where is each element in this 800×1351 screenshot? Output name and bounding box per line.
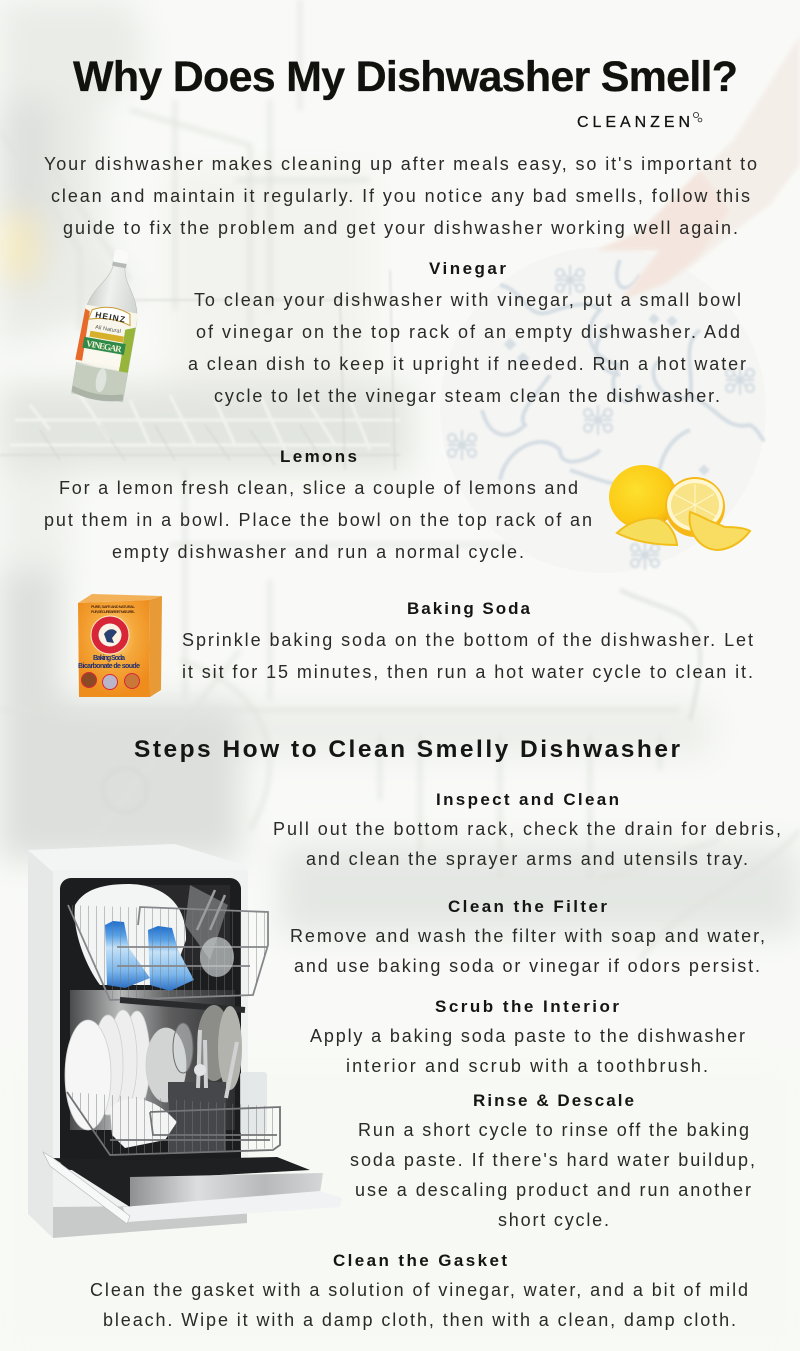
upper rack: [68, 890, 268, 1000]
heading: steps: Steps How to Clean Smelly Dishwasher: [134, 736, 680, 763]
step: scrub the interior: Apply a baking soda paste to the dishwasher: [310, 1026, 745, 1046]
step: clean the gasket: bleach. Wipe it with a damp cloth, then with a clean, damp cloth.: [103, 1310, 736, 1330]
illustration: open dishwasher: [28, 844, 342, 1238]
step: scrub the interior: interior and scrub with a toothbrush.: [346, 1056, 708, 1076]
step: rinse and descale: Run a short cycle to rinse off the baking: [358, 1120, 749, 1140]
intro text: guide to fix the problem and get your dishwasher working well again.: [63, 218, 738, 238]
dishwasher top panel: [28, 844, 247, 872]
background: patterned plate: [440, 247, 766, 573]
section: vinegar: To clean your dishwasher with vinegar, put a small bowl: [194, 290, 741, 310]
step: rinse and descale: use a descaling product and run another: [355, 1180, 751, 1200]
section: lemons: For a lemon fresh clean, slice a couple of lemons and: [59, 478, 578, 498]
section: baking soda: [182, 599, 753, 682]
section: lemons: empty dishwasher and run a normal cycle.: [112, 542, 524, 562]
logo: CLEANZEN: CLEANZEN: [577, 114, 690, 131]
background: hand holding plate: [597, 35, 800, 300]
step: rinse and descale: soda paste. If there's hard water buildup,: [350, 1150, 755, 1170]
section: baking soda: Baking Soda: [407, 599, 531, 618]
upper plates: [75, 884, 186, 985]
dishwasher interior: [60, 878, 241, 1170]
step: scrub the interior: Scrub the Interior: [435, 997, 619, 1016]
section: lemons: Lemons: [280, 447, 357, 466]
step: rinse and descale: short cycle.: [498, 1210, 609, 1230]
step: clean the filter: and use baking soda or vinegar if odors persist.: [294, 956, 760, 976]
section: lemons: [44, 447, 592, 562]
step: clean the filter: Remove and wash the filter with soap and water,: [290, 926, 765, 946]
section: baking soda: Sprinkle baking soda on the bottom of the dishwasher. Let: [182, 630, 753, 650]
icon: baking soda box: Baking Soda: [93, 655, 125, 662]
step: inspect and clean: [273, 790, 781, 869]
step: scrub the interior: [310, 997, 745, 1076]
section: vinegar: Vinegar: [429, 259, 506, 278]
section: lemons: put them in a bowl. Place the bowl on the top rack of an: [44, 510, 592, 530]
step: clean the gasket: [90, 1251, 748, 1330]
icon: vinegar bottle: All Natural: [95, 325, 121, 335]
icon: baking soda box: [78, 594, 162, 697]
title: Why Does My Dishwasher Smell?: [73, 53, 738, 101]
icon: baking soda box: Bicarbonate de soude: [78, 663, 140, 670]
lower plates: [65, 1010, 186, 1130]
section: vinegar: of vinegar on the top rack of an empty dishwasher. Add: [196, 322, 740, 342]
step: rinse and descale: [350, 1091, 755, 1230]
step: inspect and clean: Pull out the bottom rack, check the drain for debris,: [273, 819, 781, 839]
section: baking soda: it sit for 15 minutes, then run a hot water cycle to clean it.: [182, 662, 753, 682]
section: vinegar: cycle to let the vinegar steam clean the dishwasher.: [214, 386, 720, 406]
icon: baking soda box: PUR, SÉCURITAIRE ET NATUREL: [91, 609, 136, 614]
section: vinegar: [188, 259, 746, 406]
lower rack: [67, 1092, 280, 1155]
step: clean the filter: Clean the Filter: [448, 897, 607, 916]
door guide rail: [120, 1000, 245, 1010]
step: inspect and clean: and clean the sprayer arms and utensils tray.: [306, 849, 748, 869]
intro text: Your dishwasher makes cleaning up after meals easy, so it's important to: [44, 154, 757, 174]
step: clean the filter: [290, 897, 765, 976]
icon: lemons: [609, 465, 750, 550]
dishwasher side panel: [28, 850, 53, 1238]
step: clean the gasket: Clean the Gasket: [333, 1251, 507, 1270]
dishwasher front frame: [53, 870, 248, 1210]
back plates and utensils: [168, 1005, 267, 1152]
cups: [110, 1098, 177, 1148]
icon: vinegar bottle: VINEGAR: [85, 338, 123, 354]
icon: vinegar bottle: HEINZ: [95, 309, 126, 324]
intro text: clean and maintain it regularly. If you notice any bad smells, follow this: [51, 186, 750, 206]
step: clean the gasket: Clean the gasket with a solution of vinegar, water, and a bit of mild: [90, 1280, 748, 1300]
step: inspect and clean: Inspect and Clean: [436, 790, 619, 809]
open door: [43, 1152, 342, 1224]
dishwasher base: [53, 1205, 247, 1238]
icon: vinegar bottle: [69, 245, 149, 404]
intro text: [44, 154, 757, 238]
icon: baking soda box: PURE, SAFE AND NATURAL: [91, 604, 136, 609]
section: vinegar: a clean dish to keep it upright if needed. Run a hot water: [188, 354, 746, 374]
step: rinse and descale: Rinse & Descale: [473, 1091, 634, 1110]
blue glasses: [105, 921, 194, 991]
